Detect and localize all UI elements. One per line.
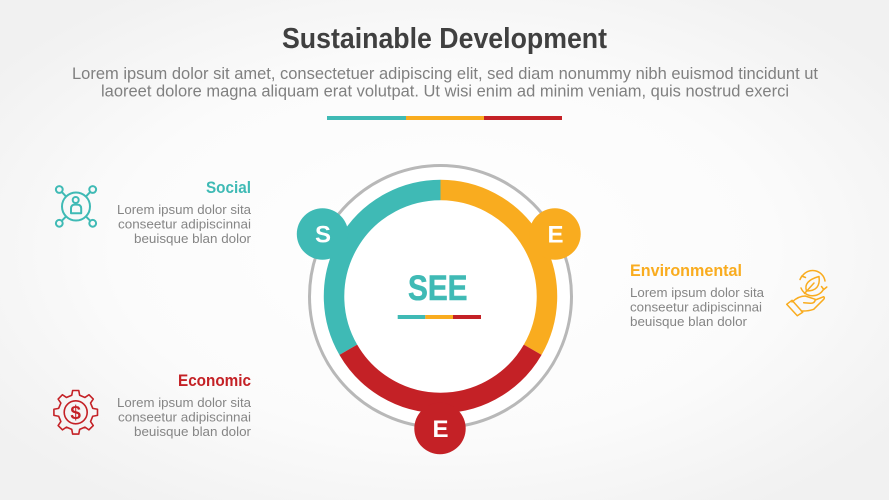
title: Sustainable Development	[282, 23, 607, 55]
text block: social: conseetur adipiscinnai	[118, 218, 251, 232]
panel: environmental	[630, 261, 827, 329]
center divider bar	[398, 315, 481, 319]
center label SEE: SEE	[408, 269, 468, 308]
badge S: S	[315, 222, 331, 248]
text block: environmental: beuisque blan dolor	[630, 315, 747, 329]
badge E economic: E	[432, 416, 449, 443]
teal ring segment	[334, 190, 440, 350]
badge E economic	[414, 403, 466, 454]
text block: economic: conseetur adipiscinnai	[118, 411, 251, 425]
heading: Social: Social	[206, 178, 251, 197]
icon: network person	[56, 186, 96, 227]
text block: economic: Lorem ipsum dolor sita	[117, 396, 251, 410]
badge S	[297, 208, 348, 260]
intro text: Lorem ipsum dolor sit amet, consectetuer adipiscing elit, sed diam nonummy nibh euismod tincidunt ut	[72, 65, 819, 83]
title divider bar	[327, 116, 562, 120]
panel: economic	[54, 371, 251, 439]
text block: environmental: conseetur adipiscinnai	[630, 300, 762, 314]
badge E environmental: E	[547, 222, 564, 248]
heading: Economic: Economic	[178, 371, 251, 390]
central circular diagram	[297, 166, 581, 454]
heading: Environmental: Environmental	[630, 261, 742, 280]
panel: social	[56, 178, 251, 246]
icon: gear with dollar	[54, 391, 97, 434]
text block: economic	[117, 396, 251, 439]
icon: gear with dollar: $	[70, 403, 81, 424]
intro text	[72, 65, 819, 100]
text block: environmental: Lorem ipsum dolor sita	[630, 286, 764, 300]
text block: social: beuisque blan dolor	[134, 232, 251, 246]
text block: environmental	[630, 286, 764, 329]
outer gray ring	[310, 166, 572, 428]
text block: social: Lorem ipsum dolor sita	[117, 203, 251, 217]
text block: economic: beuisque blan dolor	[134, 425, 251, 439]
text block: social	[117, 203, 251, 246]
red ring segment	[348, 350, 533, 403]
icon: hand with leaf	[787, 271, 827, 316]
badge E environmental	[529, 208, 581, 260]
orange ring segment	[440, 190, 547, 350]
intro text: laoreet dolore magna aliquam erat volutpat. Ut wisi enim ad minim veniam, quis nostrud exerci	[101, 82, 789, 100]
